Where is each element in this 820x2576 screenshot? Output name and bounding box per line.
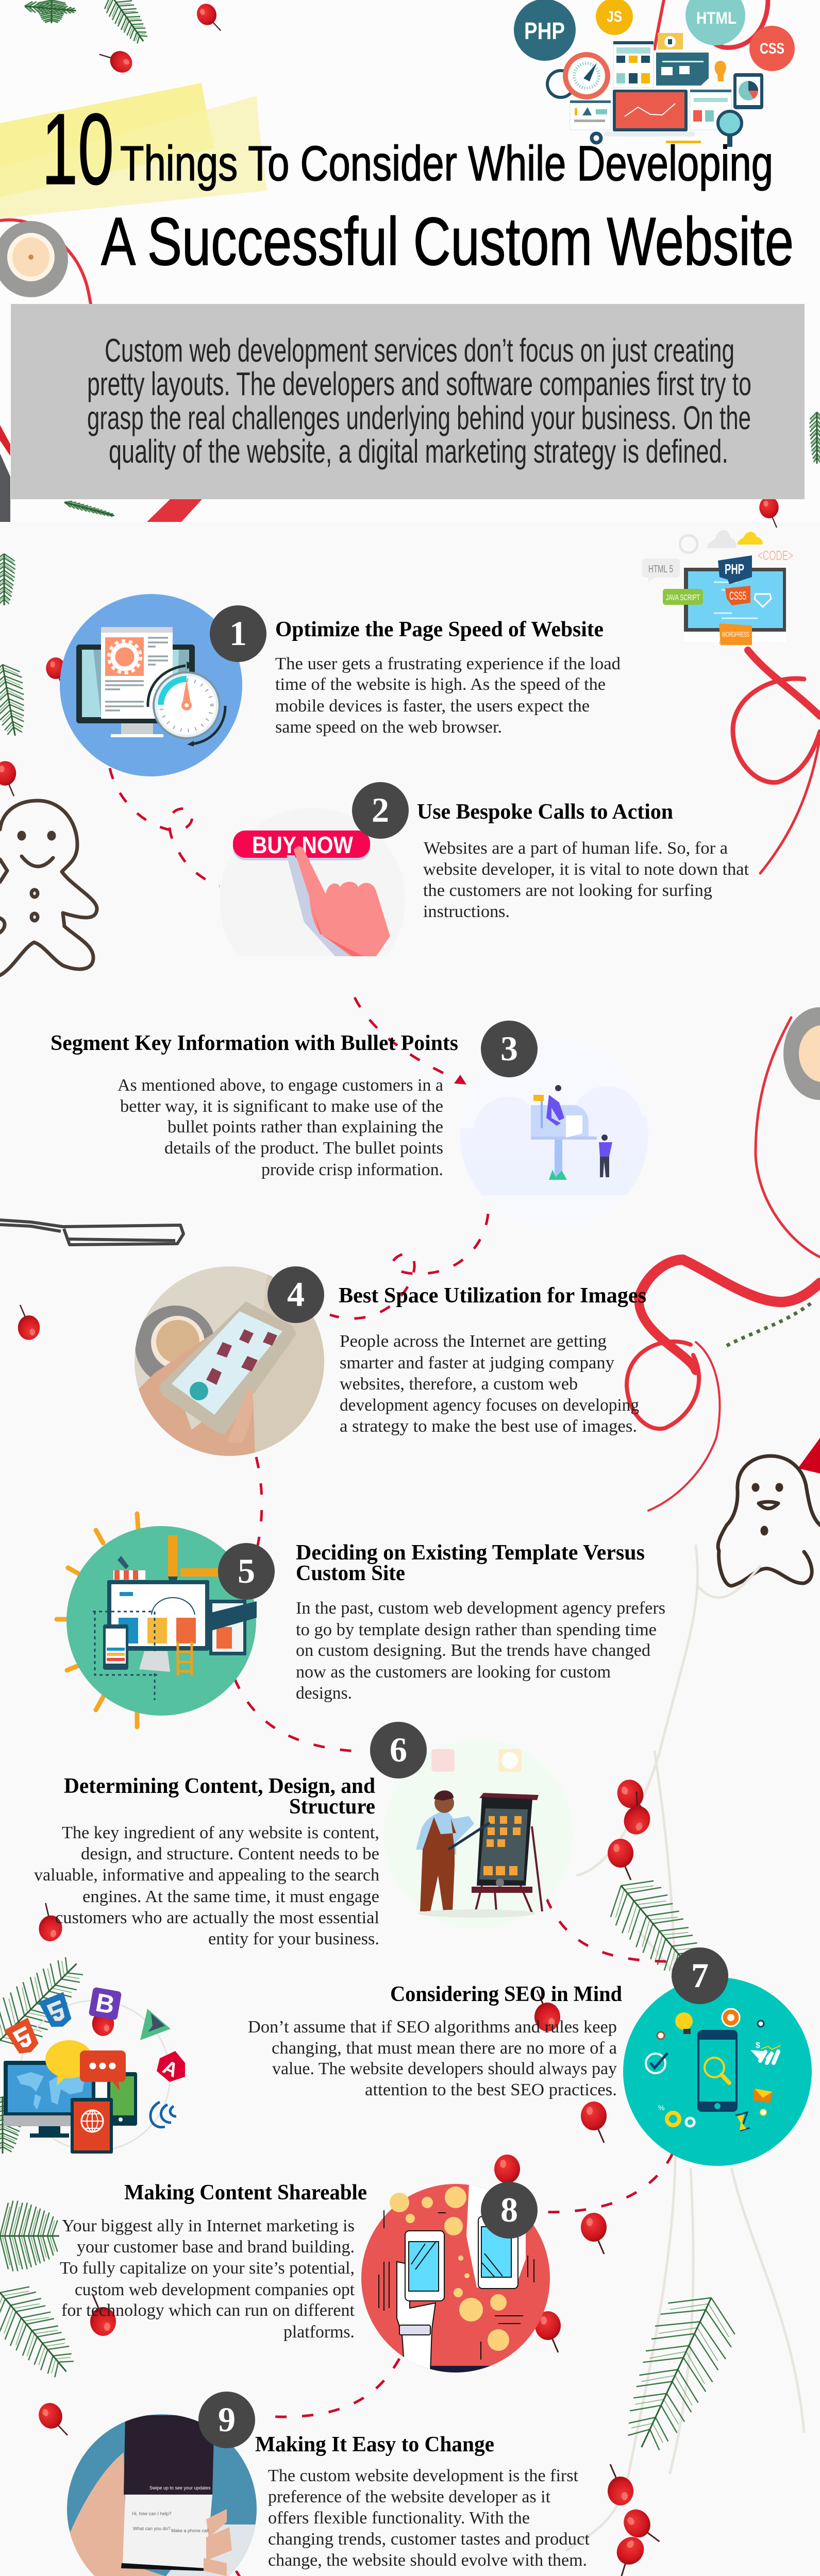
dashed connector 3 to 4 [330, 1214, 488, 1318]
dashed connector 9 to 10 [236, 2571, 438, 2576]
bootstrap logo: B [93, 1988, 117, 2020]
wordpress bubble [719, 623, 752, 645]
diamond [755, 594, 771, 607]
tablet [733, 73, 763, 109]
circle illustration: web design [66, 1526, 257, 1716]
step 4 [135, 1266, 646, 1458]
badge 7: 7 [691, 1956, 709, 1995]
header decorations [0, 0, 820, 528]
badge 3: 3 [500, 1029, 518, 1068]
icon: pine sprig top [99, 0, 155, 49]
html5 bubble: HTML 5 [648, 564, 673, 575]
heading 7: Considering SEO in Mind [390, 1982, 622, 2006]
text 3: bullet points rather than explaining the [168, 1117, 443, 1137]
orbit ring [20, 2001, 170, 2151]
dashed connector 1 to 2 [110, 768, 220, 886]
badge 1: 1 [229, 614, 247, 653]
text 3: better way, it is significant to make use of the [120, 1097, 443, 1116]
text 4: websites, therefore, a custom web [340, 1375, 578, 1394]
pine right large [606, 2281, 747, 2464]
text 4: development agency focuses on developing [340, 1396, 639, 1415]
thyme sprig [727, 1303, 811, 1346]
pencil [666, 141, 701, 143]
text 3: As mentioned above, to engage customers in a [118, 1076, 443, 1095]
text 2: the customers are not looking for surfing [423, 881, 712, 900]
text 7: Don’t assume that if SEO algorithms and rules keep [248, 2018, 617, 2037]
step 6 [34, 1722, 573, 1948]
JS bubble [596, 0, 633, 35]
text 3 [118, 1076, 443, 1179]
text 9: preference of the website developer as it [268, 2487, 551, 2506]
css3 logo [39, 1992, 75, 2031]
gingerbread man with hat [718, 1438, 820, 1586]
web technologies cluster [4, 1987, 185, 2154]
pine left lower [0, 2275, 88, 2389]
small monitor illustration top right [642, 530, 793, 645]
assistant chips [132, 2511, 209, 2533]
text 8 [60, 2216, 355, 2342]
motion lines [379, 2210, 534, 2360]
text 4: a strategy to make the best use of images. [340, 1417, 637, 1436]
text 4: smarter and faster at judging company [340, 1353, 614, 1372]
code label: <CODE> [758, 548, 793, 563]
red ribbon knot [639, 1260, 820, 1302]
yellow social dots [390, 2187, 509, 2351]
angular logo: A [159, 2056, 181, 2082]
bootstrap logo [89, 1987, 122, 2020]
step 9 [67, 2392, 590, 2576]
heading 6 [64, 1774, 375, 1819]
text 5 [296, 1599, 665, 1703]
laptop chart [604, 90, 695, 137]
berry [535, 2311, 561, 2352]
badge 9 [198, 2392, 255, 2448]
ribbon around candle [0, 220, 91, 304]
body decorations [0, 554, 820, 2576]
berry [46, 657, 65, 688]
circle illustration: sharing phones [361, 2184, 550, 2376]
PHP bubble [514, 0, 576, 61]
intro panel [11, 304, 805, 499]
ribbon loop [733, 679, 820, 783]
text 5: now as the customers are looking for custom [296, 1663, 611, 1682]
text 1 [275, 654, 621, 737]
text 6: The key ingredient of any website is content, [62, 1823, 379, 1842]
green tablet [107, 2072, 137, 2126]
vue logo [140, 2009, 171, 2040]
badge 9: 9 [218, 2400, 236, 2439]
code lines [714, 582, 758, 618]
text 9: change, the website should evolve with them. [268, 2551, 587, 2570]
yellow brush strip upper [0, 83, 214, 197]
circle illustration: phone in hand [135, 1266, 324, 1458]
yellow speech bubble [45, 2040, 93, 2086]
icon: candle [0, 221, 68, 297]
pine left lower [0, 662, 31, 738]
text 4: People across the Internet are getting [340, 1332, 607, 1351]
magnifier [718, 111, 742, 147]
gauge [563, 52, 610, 99]
badge 8: 8 [500, 2190, 518, 2229]
badge 4: 4 [287, 1275, 305, 1314]
text 2: instructions. [423, 902, 510, 921]
dashed connector 8 to 9 [265, 2359, 399, 2417]
text 9: changing trends, customer tastes and product [268, 2530, 590, 2549]
badge 2 [352, 782, 409, 839]
css5 bubble [725, 586, 750, 605]
html5 logo [4, 2018, 43, 2058]
text 9: The custom website development is the first [268, 2466, 579, 2485]
circle illustration: buy now [233, 831, 390, 956]
berries cluster one [608, 1776, 658, 1880]
ribbon long right [756, 1018, 820, 1257]
badge 4 [267, 1266, 324, 1323]
heading 5 [296, 1541, 645, 1585]
icon: pine sprig top left [37, 0, 66, 23]
red phone [71, 2098, 113, 2154]
badge 2: 2 [372, 790, 389, 829]
intro text [87, 332, 751, 470]
text 3: provide crisp information. [261, 1160, 443, 1179]
stopwatch [547, 71, 574, 97]
text 1: time of the website is high. As the speed of the [275, 675, 606, 694]
text 5: designs. [296, 1684, 352, 1703]
html5 bubble [642, 558, 680, 582]
CSS bubble [749, 26, 795, 71]
berries cluster two [603, 2464, 662, 2576]
step 7 [248, 1947, 812, 2166]
heading 6: Structure [289, 1795, 375, 1819]
circle illustration: seo mobile: $ [756, 2041, 760, 2050]
side report [690, 90, 731, 130]
red speech bubble [80, 2050, 126, 2091]
light bulb [714, 61, 726, 81]
angular logo [157, 2051, 185, 2082]
text 7 [248, 2018, 617, 2099]
text 2: website developer, it is vital to note down that [423, 860, 749, 879]
badge 1 [210, 605, 266, 662]
dashed connector 6 to 7 [546, 1898, 680, 1961]
grey cloud [707, 530, 737, 548]
yellow brush strip lower [0, 96, 267, 218]
text 8: custom web development companies opt [75, 2280, 355, 2299]
text 5: In the past, custom web development agency prefers [296, 1599, 665, 1618]
yellow cloud [738, 532, 763, 545]
heading 8: Making Content Shareable [124, 2181, 367, 2205]
text 8: platforms. [283, 2323, 355, 2342]
CSS bubble: CSS [760, 40, 784, 57]
heading 5: Deciding on Existing Template Versus [296, 1541, 645, 1565]
buy now label: BUY NOW [252, 832, 354, 858]
berry [581, 2213, 607, 2254]
css5 bubble: CSS5 [729, 589, 746, 602]
badge 6: 6 [390, 1730, 407, 1769]
wordpress bubble: WORDPRESS [722, 630, 749, 638]
pine right [810, 412, 820, 464]
text 7: attention to the best SEO practices. [365, 2080, 617, 2099]
circle illustration: speed gauge [60, 594, 242, 776]
badge 5: 5 [238, 1551, 255, 1590]
text 6: engines. At the same time, it must engage [82, 1887, 379, 1906]
berry [35, 2400, 70, 2443]
badge 5 [218, 1543, 275, 1600]
berry [494, 2155, 520, 2196]
circle illustration: seo mobile: % [658, 2104, 664, 2112]
flowchart board [656, 53, 709, 86]
icon: berry bottom right [759, 497, 779, 528]
text 6: customers who are actually the most essential [55, 1908, 379, 1927]
berry [90, 2295, 116, 2336]
java script bubble [663, 589, 703, 605]
berry [18, 1305, 40, 1340]
text 7: changing, that must mean there are no more of a [272, 2039, 617, 2058]
pen fragment [0, 453, 10, 522]
step 3 [52, 1021, 648, 1195]
circle illustration: voice assistant phone [67, 2414, 257, 2576]
text 1: mobile devices is faster, the users expect the [275, 697, 590, 716]
gingerbread man [0, 801, 97, 975]
sun rays [57, 1514, 138, 1727]
ribbon loop lower [627, 1342, 699, 1429]
pine left upper [0, 2201, 59, 2271]
step 8 [60, 2181, 550, 2376]
folder [658, 33, 683, 49]
berry [0, 761, 16, 796]
text 1: same speed on the web browser. [275, 718, 502, 737]
ribbon diagonal [748, 650, 820, 716]
badge 7 [672, 1947, 728, 2004]
JS bubble: JS [607, 8, 622, 25]
ribbon fragment left of box [0, 425, 10, 456]
pine left [0, 554, 15, 605]
PHP bubble: PHP [524, 18, 565, 44]
assistant chips: What can you do? [133, 2526, 171, 2531]
ribbon behind tech cluster [655, 0, 664, 49]
ribbon loop top right [711, 0, 768, 47]
php bubble: PHP [725, 561, 744, 577]
assistant prompt text: Swipe up to see your updates [149, 2485, 211, 2490]
text 5: to go by template design rather than spending time [296, 1620, 657, 1639]
text 9 [268, 2466, 590, 2570]
ribbon tail lower [648, 1342, 720, 1511]
step 2 [233, 782, 749, 956]
heading 1: Optimize the Page Speed of Website [275, 618, 604, 641]
monitor [684, 568, 786, 644]
frying pan [0, 1220, 183, 1245]
monitor with world map [4, 2061, 95, 2138]
pine bottom left [63, 499, 115, 519]
text 4 [340, 1332, 639, 1436]
ribbon fragment bottom [147, 499, 202, 522]
step 1 [60, 594, 621, 776]
heading 4: Best Space Utilization for Images [339, 1284, 646, 1308]
circle illustration: mailbox [460, 1085, 648, 1195]
wifi waves [150, 2102, 176, 2127]
icon: berry lower [98, 40, 137, 77]
pine under monitor [0, 2097, 23, 2154]
text 8: Your biggest ally in Internet marketing is [62, 2216, 355, 2235]
dashed connector 5 to 6 [235, 1679, 366, 1752]
assistant chips: Hi, how can I help? [132, 2511, 172, 2516]
text 7: value. The website developers should always pay [272, 2059, 617, 2078]
berry [37, 1903, 66, 1943]
ribbon tail [760, 737, 820, 873]
badge 3 [481, 1021, 538, 1077]
icon: berry [194, 1, 223, 37]
text 8: To fully capitalize on your site’s potential, [60, 2259, 355, 2278]
badge 8 [481, 2182, 538, 2239]
circle illustration: man presenting [383, 1739, 573, 1929]
document [613, 41, 654, 88]
text 2: Websites are a part of human life. So, for a [424, 839, 728, 858]
php bubble [718, 555, 752, 584]
tech cluster illustration [514, 0, 795, 147]
text 6 [34, 1823, 379, 1948]
text 2 [423, 839, 749, 921]
heading 5: Custom Site [296, 1562, 405, 1585]
title [42, 93, 794, 279]
white twigs [567, 1546, 804, 2576]
java script bubble: JAVA SCRIPT [666, 594, 700, 602]
text 9: offers flexible functionality. With the [268, 2509, 530, 2528]
heading 3: Segment Key Information with Bullet Points [51, 1031, 458, 1055]
badge 6 [370, 1722, 427, 1778]
dashed connector 4 to 5 [256, 1457, 262, 1546]
circle illustration: seo mobile [623, 1977, 812, 2166]
text 1: The user gets a frustrating experience if the load [275, 654, 621, 673]
text 3: details of the product. The bullet points [164, 1139, 443, 1158]
title number: 10 [42, 93, 114, 206]
berry behind logos [92, 2001, 114, 2036]
berry [581, 2102, 607, 2143]
pine left cluster [0, 1944, 96, 2060]
heading 2: Use Bespoke Calls to Action [417, 800, 673, 824]
gear outline [680, 535, 697, 553]
text 6: design, and structure. Content needs to be [81, 1844, 379, 1863]
dashed connector 2 to 3 [355, 997, 451, 1077]
text 6: entity for your business. [208, 1929, 379, 1948]
pine center right [598, 1867, 723, 1999]
step 5 [57, 1514, 665, 1727]
candle right [783, 1007, 820, 1100]
text 8: for technology which can run on different [61, 2301, 355, 2320]
heading 6: Determining Content, Design, and [64, 1774, 375, 1798]
text 8: your customer base and brand building. [77, 2238, 355, 2257]
HTML bubble [685, 0, 745, 45]
berry [534, 1990, 560, 2031]
text 6: valuable, informative and appealing to the search [34, 1866, 379, 1885]
icon: pine sprig top left side [24, 1, 77, 16]
HTML bubble: HTML [696, 9, 737, 27]
arrow head at step 3 [454, 1075, 466, 1084]
ribbon twist [639, 1303, 696, 1370]
gear [592, 133, 601, 143]
small report [570, 100, 611, 130]
heading 9: Making It Easy to Change [255, 2433, 494, 2456]
dashed connector 7 to 8 [536, 2154, 673, 2212]
text 5: on custom designing. But the trends have changed [296, 1641, 650, 1660]
assistant chips: Make a phone call [171, 2528, 209, 2533]
